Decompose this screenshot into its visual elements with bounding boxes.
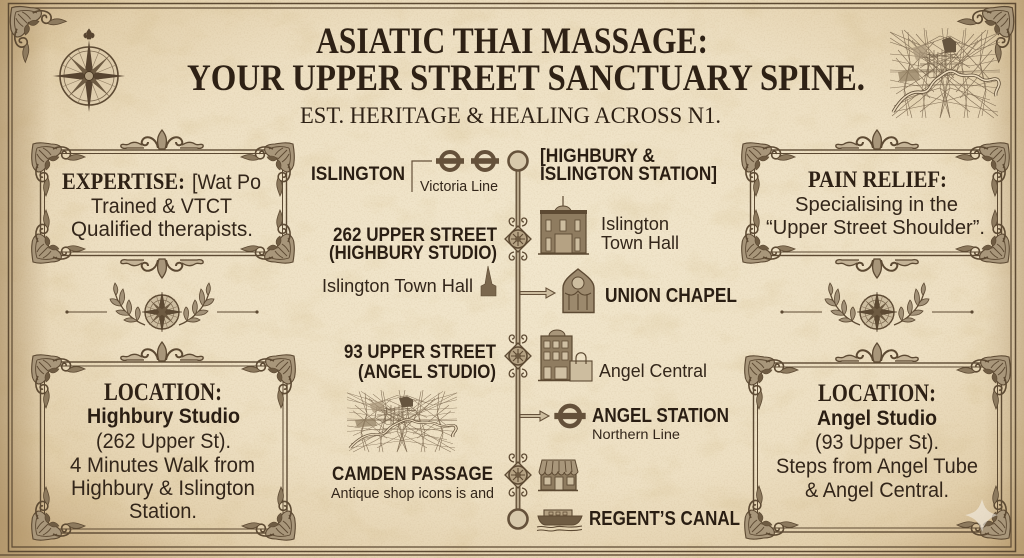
label: islington town hall left: Islington Town Hall	[322, 276, 473, 296]
label: camden passage	[331, 464, 494, 502]
panel: location highbury	[32, 342, 295, 540]
label: islington town hall right	[601, 214, 679, 253]
label: highbury and islington station: ISLINGTON STATION]	[540, 164, 717, 185]
text: location highbury: Station.	[129, 500, 197, 523]
panel: pain relief	[742, 130, 1009, 278]
panel: location angel	[745, 343, 1010, 539]
text: location angel: Angel Studio	[817, 407, 937, 430]
label: camden passage: CAMDEN PASSAGE	[332, 464, 493, 485]
divider: right laurel and compass	[780, 283, 974, 332]
text: location angel: & Angel Central.	[805, 479, 949, 502]
label: islington town hall right: Town Hall	[601, 233, 679, 253]
text: expertise: Trained & VTCT	[91, 195, 232, 218]
text: expertise: EXPERTISE:	[62, 169, 185, 194]
label: camden passage: Antique shop icons is and	[331, 486, 494, 502]
panel: expertise	[32, 130, 294, 278]
text: expertise: [Wat Po	[192, 171, 261, 194]
label: islington: ISLINGTON	[311, 164, 405, 185]
text: location angel: Steps from Angel Tube	[776, 455, 978, 478]
text: expertise: Qualified therapists.	[71, 218, 253, 241]
arrow: to union chapel	[520, 288, 555, 298]
text: location angel: LOCATION:	[818, 380, 936, 407]
label: regent's canal: REGENT’S CANAL	[589, 508, 740, 530]
icon: angel roundel	[554, 406, 586, 426]
text: pain relief: Specialising in the	[795, 194, 958, 216]
text: location highbury: Highbury & Islington	[71, 477, 255, 500]
text: location highbury	[70, 379, 255, 523]
timeline spine	[505, 152, 531, 528]
icon: spire	[481, 266, 496, 296]
text: location highbury: (262 Upper St).	[96, 430, 231, 453]
icon: small map	[347, 390, 457, 452]
icon: union chapel window	[563, 269, 594, 312]
title: ASIATIC THAI MASSAGE:	[316, 21, 708, 62]
text: pain relief: “Upper Street Shoulder”.	[766, 217, 985, 239]
text: location highbury: LOCATION:	[104, 379, 222, 406]
label: union chapel: UNION CHAPEL	[605, 285, 737, 307]
icon: town hall	[538, 196, 589, 254]
icon: building and shopping bag	[538, 330, 592, 381]
label: islington town hall right: Islington	[601, 214, 669, 234]
text: pain relief	[766, 167, 985, 239]
label: victoria line: Victoria Line	[420, 179, 498, 195]
label: 262 upper street: 262 UPPER STREET	[333, 225, 497, 246]
subtitle: EST. HERITAGE & HEALING ACROSS N1.	[300, 103, 721, 128]
label: highbury and islington station	[540, 146, 717, 185]
icon: map of London, top right	[890, 28, 1000, 118]
icon: underground roundels with bracket	[412, 152, 499, 192]
label: 93 upper street: (ANGEL STUDIO)	[358, 362, 496, 383]
title: YOUR UPPER STREET SANCTUARY SPINE.	[187, 58, 865, 99]
text: location angel: (93 Upper St).	[815, 431, 939, 454]
label: highbury and islington station: [HIGHBURY &	[540, 146, 655, 167]
icon: compass rose	[53, 29, 125, 112]
label: 262 upper street: (HIGHBURY STUDIO)	[329, 243, 497, 264]
label: angel station: Northern Line	[592, 426, 680, 442]
label: angel station	[592, 405, 729, 442]
title	[187, 21, 865, 99]
label: 93 upper street	[344, 342, 496, 383]
label: angel central: Angel Central	[599, 361, 707, 381]
text: pain relief: PAIN RELIEF:	[808, 167, 947, 192]
text: expertise	[62, 169, 261, 241]
icon: sparkle watermark	[965, 499, 998, 532]
icon: canal boat	[537, 510, 582, 531]
label: angel station: ANGEL STATION	[592, 405, 729, 427]
text: location angel	[776, 380, 978, 502]
arrow: to angel station	[520, 411, 549, 421]
icon: antique shop	[538, 460, 578, 490]
text: location highbury: 4 Minutes Walk from	[70, 454, 255, 477]
text: location highbury: Highbury Studio	[87, 405, 240, 428]
label: 262 upper street	[329, 225, 497, 264]
divider: left laurel and compass	[65, 283, 259, 332]
label: 93 upper street: 93 UPPER STREET	[344, 342, 496, 363]
